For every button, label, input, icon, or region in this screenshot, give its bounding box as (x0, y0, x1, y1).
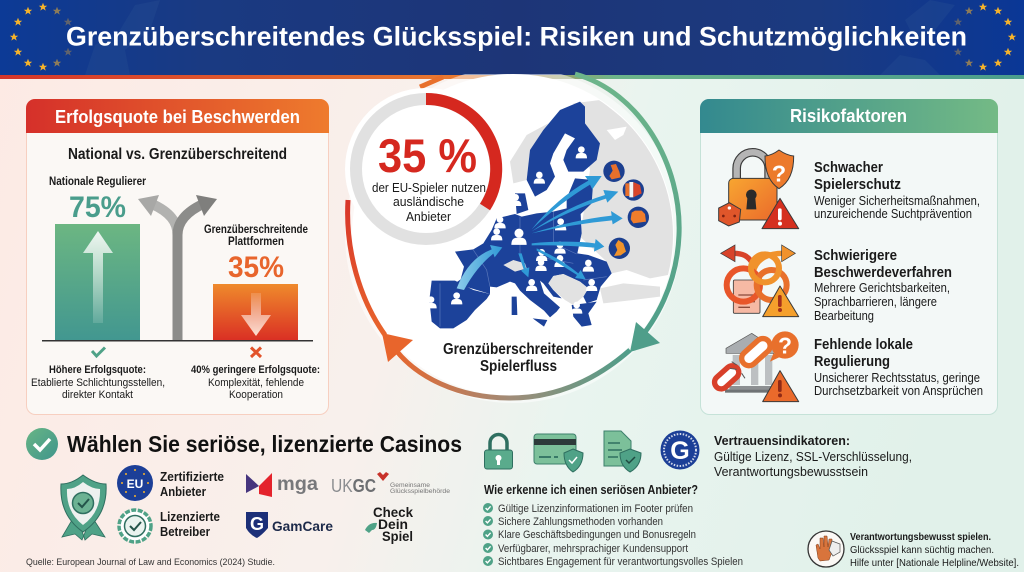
logo: Check Dein Spiel: Check (373, 505, 413, 520)
logo: UKGC (331, 472, 450, 496)
circular flow diagram (345, 67, 681, 403)
icon: document with shield (604, 431, 641, 472)
text: lower success: Kooperation (229, 389, 283, 401)
text: higher success: Höhere Erfolgsquote: (49, 364, 146, 376)
text: Schwierigere Beschwerdeverfahren: Sprachbarrieren, längere (814, 295, 937, 309)
donut text: ausländische (393, 194, 464, 209)
text: Fehlende lokale Regulierung: Durchsetzbarkeit von Ansprüchen (814, 384, 983, 398)
destination badges (603, 161, 649, 259)
label: cross-border platforms (204, 224, 308, 248)
label: licensed: Betreiber (160, 524, 210, 539)
label: licensed: Lizenzierte (160, 509, 220, 524)
text: Fehlende lokale Regulierung: Unsicherer Rechtsstatus, geringe (814, 371, 980, 385)
logo: UKGC: Glücksspielbehörde (390, 488, 450, 495)
arrow: green arc (575, 74, 679, 352)
text: higher success: Etablierte Schlichtungsstellen, (31, 377, 165, 389)
icon: shield with ribbons (61, 475, 106, 540)
logo: GamCare: G (250, 514, 264, 534)
flow caption (443, 341, 593, 375)
logo: mga (246, 473, 318, 497)
EU countries (429, 102, 612, 328)
value 35 %: 35 % (378, 129, 477, 182)
text: Schwacher Spielerschutz: Weniger Sicherheitsmaßnahmen, (814, 194, 980, 208)
icon: lock, shield, dice, warning: ? (772, 161, 786, 187)
text: Schwacher Spielerschutz: unzureichende Suchtprävention (814, 207, 972, 221)
text: trust indicators (714, 433, 912, 479)
logo: Check Dein Spiel: Spiel (382, 529, 413, 544)
panel: Risikofaktoren (700, 99, 998, 414)
responsible gaming note (808, 531, 1019, 569)
bar: national 75% (55, 224, 140, 340)
text: Schwierigere Beschwerdeverfahren (814, 247, 952, 323)
icon: bank, broken chain, warning: ? (778, 332, 792, 358)
value 35%: 35% (228, 251, 284, 284)
text: trust indicators: Gültige Lizenz, SSL-Verschlüsselung, (714, 449, 912, 464)
map of Europe (425, 100, 677, 328)
arrow: orange arc (382, 333, 630, 398)
text: higher success (31, 364, 165, 401)
EU stars right (954, 3, 1016, 71)
donut text: Anbieter (406, 209, 452, 224)
icon: hand and dice (808, 531, 844, 567)
text: lower success (191, 364, 320, 401)
title: Grenzüberschreitendes Glücksspiel: Risiken und Schutzmöglichkeiten (66, 22, 967, 52)
icon: G seal (660, 430, 700, 470)
label: national regulators: Nationale Regulierer (49, 176, 146, 188)
logo: Check Dein Spiel (365, 505, 413, 544)
text: responsible gaming: Glücksspiel kann süchtig machen. (850, 544, 994, 556)
item 5: Sichtbares Engagement für verantwortungsvolles Spielen (498, 556, 743, 568)
logo: Check Dein Spiel: Dein (378, 517, 408, 532)
icon: G seal: G (670, 437, 690, 465)
donut: 35 percent (345, 88, 507, 250)
text: Fehlende lokale Regulierung (814, 336, 983, 398)
text: lower success: 40% geringere Erfolgsquote: (191, 364, 320, 376)
text: Schwierigere Beschwerdeverfahren: Mehrere Gerichtsbarkeiten, (814, 281, 950, 295)
text: Schwacher Spielerschutz (814, 159, 980, 221)
panel heading: Risikofaktoren (790, 106, 907, 126)
icon: EU badge (117, 465, 153, 501)
text: responsible gaming: Verantwortungsbewusst spielen. (850, 531, 991, 543)
donut text (372, 180, 486, 224)
arrow: red arc (348, 200, 385, 335)
logo: GamCare (246, 512, 333, 538)
icon: cross (251, 348, 261, 357)
icon: padlock (484, 435, 512, 469)
icon: licensed badge (119, 510, 151, 542)
label: cross-border platforms: Plattformen (228, 236, 284, 248)
bar: cross-border 35% (213, 284, 298, 340)
checklist heading: Wie erkenne ich einen seriösen Anbieter? (484, 482, 698, 497)
label: certified: Zertifizierte (160, 469, 224, 484)
label: licensed (160, 509, 220, 539)
item 2: Sichere Zahlungsmethoden vorhanden (498, 516, 663, 528)
icon: tangled arrows, document, warning (721, 245, 799, 317)
flow caption: Grenzüberschreitender (443, 341, 593, 358)
icon: check circle (26, 428, 58, 460)
checklist: serious provider (483, 482, 743, 568)
trust icons (484, 430, 912, 479)
value 75%: 75% (69, 191, 126, 224)
subheading: National vs. Grenzüberschreitend (68, 146, 287, 163)
label: certified: Anbieter (160, 484, 206, 499)
player icons (425, 146, 597, 314)
donut text: der EU-Spieler nutzen (372, 180, 486, 195)
Switzerland and non-EU Balkans (503, 260, 588, 305)
icon: payment card (534, 434, 583, 472)
text: Schwacher Spielerschutz: Spielerschutz (814, 176, 901, 193)
text: responsible gaming (850, 531, 1019, 569)
logo: UKGC: UKGC (331, 476, 376, 496)
logo: UKGC: Gemeinsame (390, 482, 430, 489)
icon: check (92, 348, 105, 356)
panel: Erfolgsquote bei Beschwerden (26, 99, 329, 414)
text: trust indicators: Verantwortungsbewusstsein (714, 464, 868, 479)
text: Schwierigere Beschwerdeverfahren: Bearbeitung (814, 309, 874, 323)
logo: GamCare: GamCare (272, 518, 333, 534)
text: trust indicators: Vertrauensindikatoren: (714, 433, 850, 448)
text: Schwacher Spielerschutz: Schwacher (814, 159, 883, 176)
item 4: Verfügbarer, mehrsprachiger Kundensupport (498, 543, 688, 555)
surrounding land (510, 100, 677, 303)
flow caption: Spielerfluss (480, 358, 557, 375)
header banner (0, 0, 1024, 79)
logo: mga: mga (277, 474, 318, 495)
arrow: diverging paths (138, 195, 217, 340)
item 3: Klare Geschäftsbedingungen und Bonusregeln (498, 529, 696, 541)
text: Schwierigere Beschwerdeverfahren: Schwierigere (814, 247, 897, 264)
icon: EU badge: EU (127, 477, 143, 491)
panel heading: Erfolgsquote bei Beschwerden (55, 107, 300, 127)
source note: Quelle: European Journal of Law and Economics (2024) Studie. (26, 557, 275, 568)
text: Schwierigere Beschwerdeverfahren: Beschwerdeverfahren (814, 264, 952, 281)
label: cross-border platforms: Grenzüberschreitende (204, 224, 308, 236)
icon: lock, shield, dice, warning (719, 150, 799, 229)
text: Fehlende lokale Regulierung: Regulierung (814, 353, 890, 370)
label: certified (160, 469, 224, 499)
EU stars left (10, 3, 72, 71)
section heading: Wählen Sie seriöse, lizenzierte Casinos (67, 431, 462, 457)
flow arrows (457, 176, 623, 290)
section: licensed casinos (26, 428, 462, 544)
text: Fehlende lokale Regulierung: Fehlende lokale (814, 336, 913, 353)
text: lower success: Komplexität, fehlende (208, 377, 304, 389)
item 1: Gültige Lizenzinformationen im Footer prüfen (498, 503, 693, 515)
text: higher success: direkter Kontakt (62, 389, 133, 401)
icon: bank, broken chain, warning (712, 331, 799, 402)
